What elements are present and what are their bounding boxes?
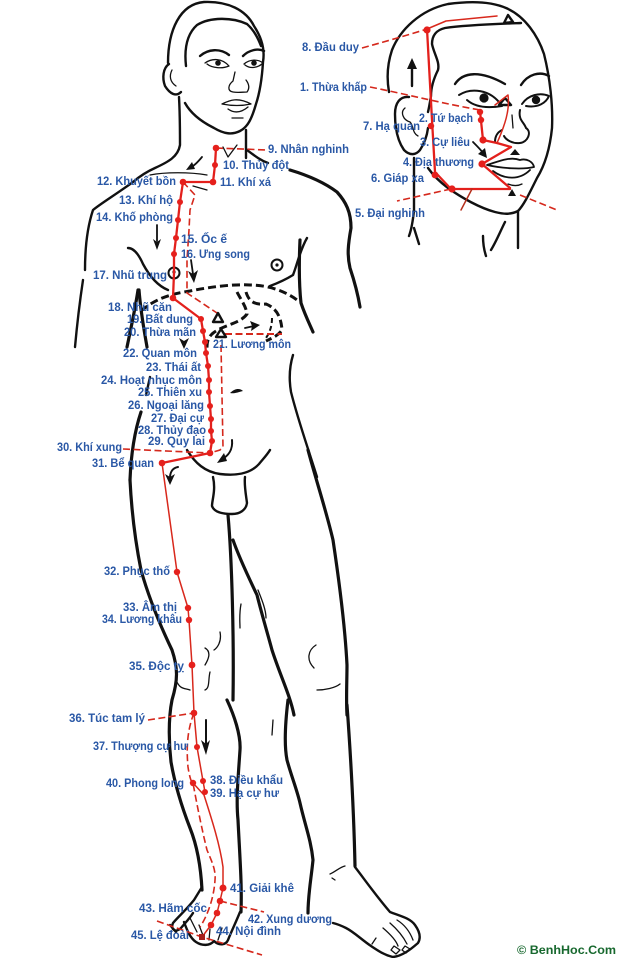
- arrow: shin: [201, 720, 210, 755]
- labels: acupoint names: 8. Đầu duy: [302, 42, 360, 54]
- labels: acupoint names: 19. Bất dung: [127, 314, 193, 326]
- labels: acupoint names: 45. Lệ đoài: [131, 930, 189, 942]
- labels: acupoint names: 31. Bể quan: [92, 458, 154, 470]
- labels: acupoint names: 10. Thủy đột: [223, 160, 289, 172]
- labels: acupoint names: 4. Địa thương: [403, 157, 474, 169]
- left leg (viewer): [130, 480, 241, 912]
- labels: acupoint names: 25. Thiên xu: [138, 387, 202, 399]
- arrow: neck to collarbone: [186, 157, 202, 170]
- red solid line: thigh and shin: [162, 463, 205, 792]
- labels: acupoint names: 14. Khố phòng: [96, 212, 173, 224]
- nipple right: [272, 260, 282, 270]
- labels: acupoint names: 9. Nhân nghinh: [268, 144, 349, 156]
- labels: acupoint names: 22. Quan môn: [123, 348, 197, 360]
- hairline and ears: [163, 19, 261, 94]
- right leg (viewer): [233, 450, 355, 913]
- head outline: [168, 2, 264, 133]
- chest and torso: [75, 173, 317, 480]
- labels: acupoint names: 11. Khí xá: [220, 177, 272, 189]
- labels: acupoint names: 15. Ốc ế: [181, 232, 228, 246]
- nose: [495, 110, 529, 143]
- labels: acupoint names: 35. Độc tỵ: [129, 661, 185, 673]
- eyes: [459, 91, 549, 107]
- points on head: [423, 26, 487, 193]
- labels: acupoint names: 28. Thủy đạo: [138, 425, 206, 437]
- labels: acupoint names: 3. Cự liêu: [420, 137, 470, 149]
- direction arrows on body: [153, 157, 260, 755]
- labels: acupoint names: 26. Ngoại lăng: [128, 400, 204, 412]
- labels: acupoint names: 36. Túc tam lý: [69, 713, 146, 725]
- body triangles: [213, 313, 226, 337]
- red branch: lower leg: [193, 783, 223, 937]
- copyright: © BenhHoc.Com: [517, 943, 616, 957]
- red solid line: trunk: [162, 148, 216, 463]
- labels: acupoint names: 6. Giáp xa: [371, 173, 425, 185]
- labels: acupoint names: 37. Thượng cự hư: [93, 741, 189, 753]
- neck and shoulders: [85, 97, 360, 307]
- labels: acupoint names: 12. Khuyết bồn: [97, 176, 176, 188]
- nipple left: [168, 268, 180, 278]
- labels: acupoint names: 30. Khí xung: [57, 442, 122, 454]
- points on body: [159, 145, 226, 940]
- ear: [395, 97, 428, 154]
- labels: acupoint names: 42. Xung dương: [248, 914, 332, 926]
- mouth: [487, 159, 534, 186]
- labels: acupoint names: 20. Thừa mãn: [124, 327, 196, 339]
- arrow up beside temple: [407, 58, 417, 86]
- labels: acupoint names: 17. Nhũ trung: [93, 270, 167, 282]
- head outline: [388, 2, 552, 214]
- arrow: chest: [153, 225, 161, 250]
- labels: acupoint names: 41. Giải khê: [230, 883, 294, 895]
- labels: acupoint names: 44. Nội đình: [216, 926, 281, 938]
- arrow: groin: [217, 440, 232, 463]
- labels: acupoint names: 18. Nhũ căn: [108, 302, 172, 314]
- labels: acupoint names: 16. Ưng song: [181, 249, 250, 261]
- red dashed branches: [123, 148, 282, 955]
- head detail: face close-up: [362, 2, 557, 256]
- labels: acupoint names: 21. Lương môn: [213, 339, 291, 351]
- hairline: [428, 23, 521, 112]
- labels: acupoint names: 7. Hạ quan: [363, 121, 420, 133]
- figure: full body outline: [75, 2, 420, 957]
- left foot (viewer): [170, 887, 240, 945]
- labels: acupoint names: 1. Thừa khấp: [300, 82, 367, 94]
- arrow: below breast: [188, 260, 198, 283]
- labels: acupoint names: 40. Phong long: [106, 778, 184, 790]
- arrow: hip: [165, 467, 178, 485]
- labels: acupoint names: 43. Hãm cốc: [139, 903, 208, 915]
- arrow: stomach: [245, 321, 260, 331]
- labels: acupoint names: 13. Khí hộ: [119, 195, 173, 207]
- labels: acupoint names: 24. Hoạt nhục môn: [101, 375, 202, 387]
- arrow toward mouth: [473, 142, 487, 158]
- labels: acupoint names: 33. Âm thị: [123, 601, 177, 614]
- labels: acupoint names: 2. Tứ bạch: [419, 113, 473, 125]
- labels: acupoint names: 34. Lương khâu: [102, 614, 182, 626]
- right foot (viewer): [330, 866, 420, 957]
- ear inner: [403, 108, 418, 136]
- labels: acupoint names: 39. Hạ cự hư: [210, 788, 280, 800]
- arrow: abdomen: [179, 338, 189, 349]
- labels: acupoint names: 27. Đại cự: [151, 413, 205, 425]
- neck lines: [409, 158, 518, 256]
- labels: acupoint names: 32. Phục thố: [104, 566, 170, 578]
- labels: acupoint names: [57, 42, 474, 942]
- eyebrows: [455, 74, 549, 85]
- labels: acupoint names: 38. Điều khẩu: [210, 775, 283, 787]
- meridian on body: [123, 145, 282, 955]
- diaphragm and stomach dashed outline: [141, 285, 297, 348]
- labels: acupoint names: 5. Đại nghinh: [355, 208, 425, 220]
- face features: [200, 50, 264, 118]
- triangles on head: [499, 15, 520, 196]
- labels: acupoint names: 23. Thái ất: [146, 362, 201, 374]
- meridian on head: [362, 16, 557, 210]
- labels: acupoint names: 29. Quy lai: [148, 436, 205, 448]
- belly and groin: [187, 450, 270, 514]
